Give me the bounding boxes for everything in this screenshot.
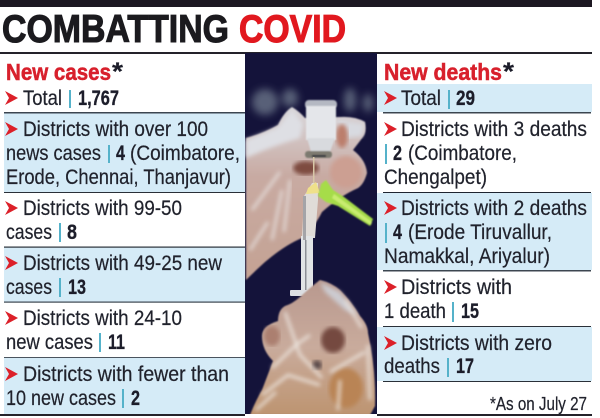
- row: zero deaths: Districts with zero: [401, 332, 552, 355]
- row: 99-50 cases: Districts with 99-50: [23, 197, 182, 220]
- upper gloved hand: [246, 107, 367, 280]
- row: 99-50 cases: cases: [6, 221, 52, 244]
- row: over 100 cases: Districts with over 100: [23, 118, 208, 141]
- row: over 100 cases: 4: [116, 142, 125, 165]
- row: 3 deaths: [384, 118, 587, 189]
- row: 99-50 cases: [5, 197, 182, 244]
- row: over 100 cases: news cases: [6, 142, 101, 165]
- row: zero deaths: [384, 332, 552, 378]
- row: fewer than 10 cases: 2: [131, 387, 140, 410]
- lower gloved hand: [250, 280, 375, 415]
- row: 99-50 cases: 8: [67, 221, 77, 244]
- row: 49-25 cases: 13: [68, 276, 86, 299]
- row: zero deaths: deaths: [384, 355, 440, 378]
- row: 24-10 cases: Districts with 24-10: [23, 307, 182, 330]
- row: 1 death: Districts with: [401, 276, 512, 299]
- row: 2 deaths: 4: [393, 221, 402, 244]
- row: over 100 cases: Erode, Chennai, Thanjavur): [6, 166, 231, 189]
- top black bar: [0, 0, 592, 7]
- panel: new cases: [0, 58, 245, 416]
- row: total deaths: [384, 87, 475, 110]
- row: total cases: 1,767: [78, 87, 119, 110]
- heading: new cases: *: [112, 58, 123, 86]
- row: total deaths: Total: [401, 87, 441, 110]
- row: 1 death: [384, 276, 512, 323]
- row: 1 death: 15: [461, 300, 479, 323]
- heading: new cases: New cases: [6, 59, 111, 85]
- row: 2 deaths: [384, 197, 587, 268]
- row: 2 deaths: Districts with 2 deaths: [401, 197, 587, 220]
- row: 3 deaths: (Coimbatore,: [408, 142, 517, 165]
- vial: [305, 100, 337, 158]
- row: 49-25 cases: Districts with 49-25 new: [23, 252, 223, 275]
- row: total cases: Total: [23, 87, 62, 110]
- row: 3 deaths: Districts with 3 deaths: [401, 118, 587, 141]
- row: total cases: [5, 87, 119, 110]
- row: fewer than 10 cases: 10 new cases: [6, 387, 116, 410]
- row: fewer than 10 cases: Districts with fewer than: [23, 363, 229, 386]
- row: fewer than 10 cases: [5, 363, 229, 410]
- heading: new deaths: New deaths: [384, 59, 502, 85]
- heading: new deaths: *: [503, 58, 514, 86]
- row: 49-25 cases: cases: [6, 276, 52, 299]
- row: 3 deaths: Chengalpet): [384, 166, 487, 189]
- photo: gloved hands filling syringe from vial: [245, 53, 377, 415]
- blurred background lights: [252, 88, 373, 115]
- row: 1 death: 1 death: [384, 300, 446, 323]
- row: 24-10 cases: [5, 307, 182, 354]
- row: total deaths: 29: [456, 87, 475, 110]
- row: over 100 cases: (Coimbatore,: [130, 142, 240, 165]
- row: 24-10 cases: new cases: [6, 331, 93, 354]
- row: 24-10 cases: 11: [108, 331, 125, 354]
- row: 3 deaths: 2: [393, 142, 402, 165]
- row: 2 deaths: (Erode Tiruvallur,: [408, 221, 552, 244]
- title: COVID: [239, 8, 346, 51]
- syringe: [290, 157, 320, 296]
- panel: new deaths: [377, 58, 592, 416]
- row: 49-25 cases: [5, 252, 223, 299]
- row: over 100 cases: [5, 118, 240, 189]
- row: zero deaths: 17: [456, 355, 474, 378]
- green needle cap: [318, 180, 373, 226]
- title rule: [0, 52, 592, 54]
- row: 2 deaths: Namakkal, Ariyalur): [384, 245, 550, 268]
- title: COMBATTING: [2, 8, 229, 51]
